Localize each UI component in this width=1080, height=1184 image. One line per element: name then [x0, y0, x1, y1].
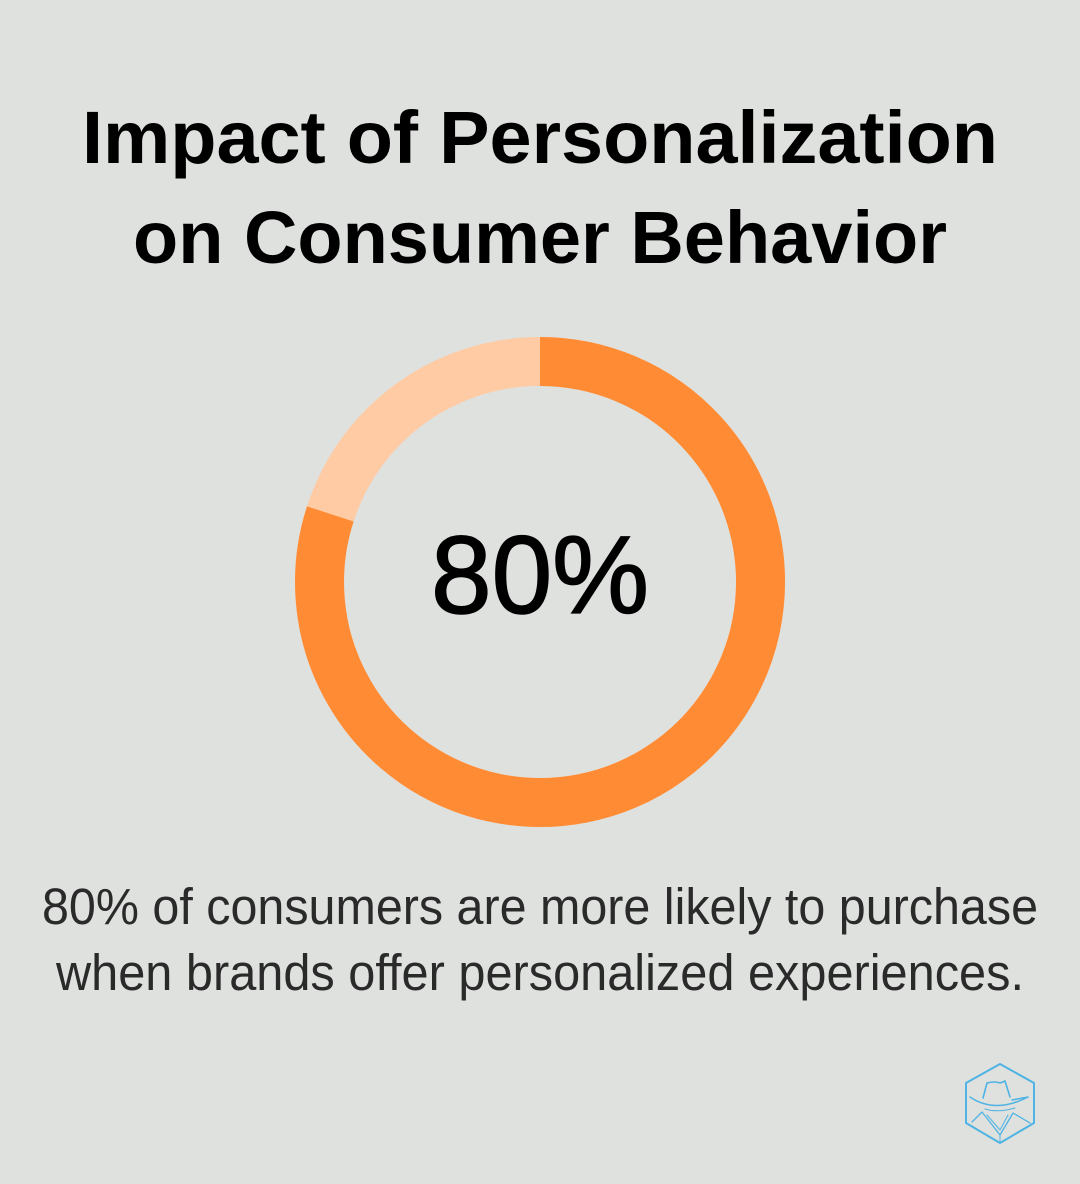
title: Impact of Personalization: [82, 96, 998, 179]
donut centre value: 80%: [431, 514, 649, 637]
description text: [42, 878, 1038, 1001]
title: on Consumer Behavior: [133, 196, 947, 279]
description text: 80% of consumers are more likely to purchase: [42, 878, 1038, 935]
description text: when brands offer personalized experiences.: [55, 944, 1024, 1001]
title: [82, 96, 998, 279]
donut chart: 80 percent: [320, 362, 761, 802]
icon: logo hexagon with hat spy: [966, 1064, 1034, 1143]
